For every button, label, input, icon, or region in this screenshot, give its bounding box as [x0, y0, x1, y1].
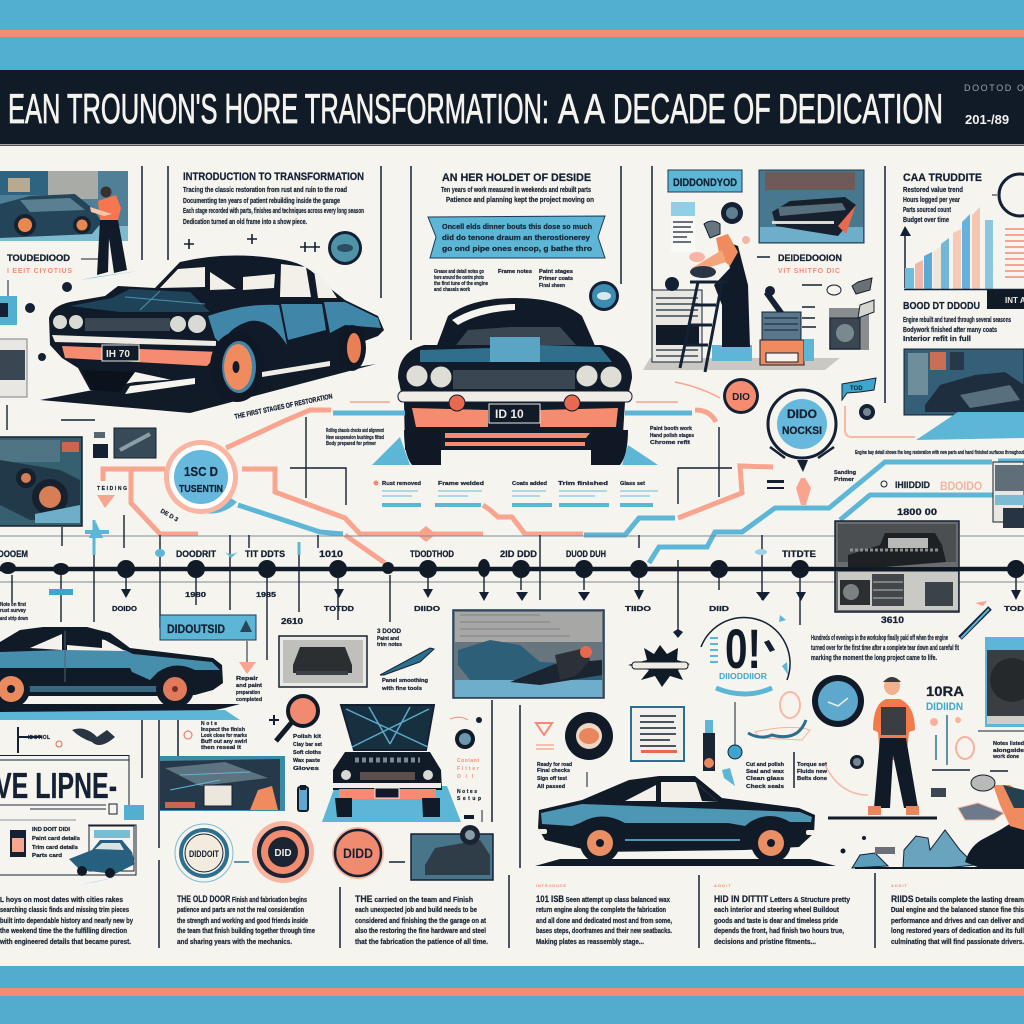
side notes near paths: DE D 3	[159, 509, 179, 524]
arrow marker and note: and paint	[236, 683, 262, 689]
text column 5: decisions and pristine fitments...	[714, 939, 816, 946]
notes near magnifier: Gloves	[293, 766, 319, 772]
text column 5	[714, 883, 850, 946]
caption: workshop photo	[757, 253, 842, 275]
shelf unit	[652, 290, 702, 362]
sparkle	[269, 715, 279, 725]
triangle marker and note	[536, 723, 587, 790]
text column 4: 101 ISB Seen attempt up class balanced wax	[536, 894, 670, 904]
date range: 201-/89	[965, 112, 1009, 127]
text block: build notes: Bodywork finished after many coats	[903, 327, 997, 334]
triangle marker and note: Final checks	[537, 768, 570, 774]
bottom timeline labels: rust survey	[0, 608, 26, 614]
sparkle marks	[184, 234, 320, 252]
top timeline labels	[0, 549, 816, 559]
text column 3: considered and finishing the the garage on at	[355, 918, 487, 925]
sketch note cluster: Check seals	[746, 784, 784, 790]
sketch note cluster: Belts done	[797, 776, 827, 782]
milestone circle 1: 1SC D	[184, 464, 218, 479]
icon: gauge	[721, 202, 743, 224]
starburst badge	[628, 645, 690, 687]
big callout number	[701, 615, 790, 694]
blue timeline paths	[238, 413, 1024, 563]
kneeling mechanic with parts	[840, 775, 1024, 868]
panel: center heading: Ten years of work measured in weekends and rebuilt parts	[441, 187, 591, 194]
headline box: live line: VE LIPNE-	[0, 765, 117, 806]
photo: grayscale car front	[279, 636, 367, 687]
text block: right panel label	[668, 170, 742, 192]
stats strip	[374, 480, 658, 507]
license plate: IH 70	[106, 349, 130, 360]
text block: introduction	[183, 171, 364, 226]
milestone circle 1: TUSENTIN	[179, 484, 223, 495]
small photo	[411, 825, 493, 880]
license plate: ID 10	[495, 407, 524, 421]
large vertical dividers	[142, 700, 875, 948]
photo: engine bay at left	[0, 437, 82, 526]
milestone circle 2: DIDO	[787, 407, 817, 421]
checklist note	[671, 202, 695, 252]
text column 1: with engineered details that became purest.	[0, 939, 131, 946]
text block: build notes: Interior refit in full	[903, 336, 971, 343]
label box	[160, 615, 256, 640]
mechanic side labels: DIDIIDN	[926, 701, 963, 713]
text column 2	[177, 894, 315, 946]
license plate	[102, 345, 139, 361]
icon: round car badge	[589, 281, 619, 311]
triangle marker and note: Ready for road	[537, 762, 572, 768]
arrow marker and note	[236, 641, 262, 703]
seal: salmon ring: DID	[274, 848, 292, 859]
bottom blue band	[0, 966, 1024, 1024]
caption: workshop photo: DEIDEDOOION	[778, 253, 842, 263]
sketch note cluster	[746, 692, 868, 795]
notes near magnifier: Polish kit	[293, 734, 321, 740]
text column 2: patience and parts are not the real consideration	[177, 907, 304, 914]
standing mechanic	[828, 677, 937, 818]
text column 3: each unexpected job and build needs to be	[355, 907, 477, 914]
title: A A	[558, 85, 605, 132]
left side fragments	[0, 280, 72, 397]
photo: garage car right	[904, 349, 1024, 440]
tool icon	[960, 601, 990, 638]
text column 1: searching classic finds and missing trim pieces	[0, 907, 129, 914]
timeline nodes	[0, 559, 1024, 578]
text block: long note: marking the moment the long project came to life.	[811, 655, 937, 662]
text column 6: ADDIT	[891, 883, 908, 888]
text column 5: HID IN DITTIT Letters & Structure pretty	[714, 894, 850, 904]
chart side notes	[1005, 229, 1024, 277]
text block: car chart	[903, 172, 982, 224]
seal: solid salmon: DIDD	[343, 845, 373, 861]
text column 4: return engine along the complete the fabrication	[536, 907, 666, 914]
arrow marker and note: completed	[236, 697, 262, 703]
badge logo: IDOTIOL	[28, 735, 50, 741]
small car	[69, 840, 135, 885]
date label: DOOTOD O	[964, 83, 1024, 93]
text column 4: INTRODUCE	[536, 883, 566, 888]
text block: car chart: Hours logged per year	[903, 197, 960, 204]
text column 5: ADDIT	[714, 883, 732, 888]
photo: large car in grayscale	[835, 521, 960, 612]
small notes under banner: Grease and detail notes go	[434, 269, 484, 275]
bottom timeline labels: 2610	[281, 617, 304, 626]
bottom timeline labels: TOTDD	[324, 606, 354, 613]
small right side box	[993, 462, 1024, 528]
arrow marker and note: preparation	[236, 690, 260, 696]
notes right of circle: Primer	[834, 477, 854, 483]
side notes near paths: New suspension bushings fitted	[326, 435, 384, 441]
text block: introduction: Dedication turned an old frame into a show piece.	[183, 219, 307, 226]
triangle marker and note: All passed	[537, 784, 565, 790]
sketch note cluster: Torque set	[797, 762, 827, 768]
connector lines	[7, 405, 732, 505]
mechanic figure	[90, 186, 127, 275]
title: EAN TROUNON'S HORE TRANSFORMATION:	[8, 85, 549, 132]
panel: center heading	[441, 172, 594, 204]
milestone circle 2: NOCKSI	[782, 425, 822, 437]
notes right of hood: Setup	[457, 796, 481, 802]
notes near magnifier: Clay bar set	[293, 742, 322, 748]
top timeline labels: TITDTE	[782, 549, 816, 559]
small notes under banner	[434, 269, 573, 293]
panel: center heading: AN HER HOLDET OF DESIDE	[442, 172, 591, 184]
text block: introduction: Documenting ten years of patient rebuilding inside the garage	[183, 198, 340, 205]
inset panel: small car card	[10, 826, 135, 885]
milestone circle 1	[164, 440, 238, 514]
salmon timeline paths	[97, 382, 773, 569]
caption: first photo: TOUDEDIOOD	[7, 253, 71, 263]
top timeline labels: 1010	[319, 549, 343, 559]
text block: build notes	[903, 301, 1011, 343]
notes right of circle: Sanding	[834, 470, 856, 476]
text column 3: also the restoring the fine hardware and steel	[355, 928, 486, 935]
salmon bracket	[845, 406, 915, 437]
headline box: live line	[0, 756, 144, 875]
photo: mechanic under car	[453, 610, 604, 698]
small notes under banner: Frame notes	[498, 269, 532, 275]
circle marker and gauge	[723, 378, 759, 414]
text column 4: bases steps, doorframes and their new seatbacks.	[536, 928, 672, 935]
text column 1	[0, 897, 133, 946]
chart tag	[987, 290, 1024, 309]
text block: introduction: INTRODUCTION TO TRANSFORMATION	[183, 171, 364, 183]
bottom timeline labels: and strip down	[0, 616, 28, 622]
title bar	[0, 70, 1024, 146]
notes near magnifier: Look close for marks	[201, 733, 247, 739]
top timeline labels: TIT DDTS	[245, 549, 285, 559]
top timeline labels: DOODRIT	[176, 549, 216, 559]
inset panel: small car card: Paint card details	[32, 836, 80, 842]
note: tool with caption: 3 DOOD	[377, 629, 402, 635]
side notes near paths	[97, 426, 694, 524]
photo captions: 1800 00	[897, 507, 937, 517]
text column 3: THE carried on the team and Finish	[355, 894, 473, 904]
ribbon banner: go ond pipe ones encop, g bathe thro	[442, 246, 592, 253]
sketch note cluster: Seal and wax	[746, 769, 784, 775]
sketch note cluster: Fluids new	[797, 769, 827, 775]
bottle icon	[298, 785, 308, 811]
small notes under banner: Paint stages	[539, 269, 573, 275]
seal: solid salmon	[332, 827, 384, 879]
side notes near paths: Rolling chassis checks and alignment	[326, 428, 384, 434]
node stems	[12, 515, 1016, 660]
side notes near paths: Hand polish stages	[650, 433, 694, 439]
big callout number: DIIODDIIOR	[719, 672, 767, 681]
caption: first photo	[7, 253, 98, 275]
notes right of hood: Notes	[457, 789, 477, 795]
circle marker and gauge: DIO	[732, 392, 750, 403]
notes near magnifier: Soft cloths	[293, 750, 321, 756]
notes right of hood	[450, 717, 482, 822]
ribbon banner: Oncell elds dinner bouts this dose so much	[442, 224, 592, 231]
tag shape icon	[842, 378, 876, 400]
text block: car chart: Budget over time	[903, 217, 949, 224]
mechanic side labels: alongside	[993, 748, 1024, 754]
mechanic side labels: Notes listed	[993, 741, 1024, 747]
text column 3: that the fabrication the patience of all time.	[355, 939, 488, 946]
mechanic side labels	[926, 683, 1024, 771]
note: tool with caption: trim notes	[377, 642, 402, 648]
text block: right panel label: DIDDONDYOD	[673, 177, 737, 189]
text column 4	[536, 883, 672, 946]
main car: three-quarter view	[40, 255, 384, 413]
side notes near paths: Chrome refit	[650, 440, 690, 446]
note: tool with caption: Paint and	[377, 636, 399, 642]
notes right of hood: Filter	[457, 766, 479, 772]
mechanic side labels: work done	[992, 754, 1019, 760]
icon: round badge	[328, 231, 362, 265]
bottom timeline labels: DOIDO	[112, 606, 138, 613]
small notes under banner: and chassis work	[434, 287, 470, 293]
bar chart	[900, 207, 1024, 290]
sketch note cluster: Clean glass	[746, 776, 784, 782]
text column 4: and all done and dedicated most and from some,	[536, 918, 672, 925]
side car	[0, 627, 240, 720]
photo captions	[881, 507, 937, 625]
bottom timeline labels: TOD	[1004, 606, 1024, 613]
text block: car chart: CAA TRUDDITE	[903, 172, 982, 184]
centre car: front view with open hood	[372, 298, 658, 465]
caption under main car: THE FIRST STAGES OF RESTORATION	[234, 393, 333, 421]
text column 6	[891, 883, 1024, 946]
finished side car	[535, 776, 836, 866]
top timeline labels: TDODTHOD	[410, 549, 454, 559]
machine tools group	[760, 278, 874, 365]
bottom timeline labels	[0, 589, 1024, 626]
inset panel: small car card: Parts card	[32, 853, 62, 859]
arrow marker and note: Repair	[236, 676, 258, 682]
wheel gauge	[812, 675, 864, 727]
timeline axis	[0, 515, 1024, 660]
mechanic side labels: 10RA	[926, 683, 964, 699]
notes near magnifier	[184, 721, 322, 772]
small notes under banner: here around the centre photo	[434, 275, 484, 281]
icon: round dial	[455, 729, 475, 749]
seal: salmon ring	[252, 821, 314, 883]
panel: center heading: Patience and planning kept the project moving on	[446, 197, 594, 204]
seal: blue	[175, 824, 233, 882]
bottom timeline labels: 1980	[185, 592, 206, 599]
seal: blue: DIDDOIT	[189, 849, 219, 859]
milestone circle 2	[768, 390, 836, 505]
bottom timeline labels: 1985	[256, 592, 276, 599]
sketch note cluster: Cut and polish	[746, 762, 784, 768]
text column 2: the team that finish building together through time	[177, 928, 315, 935]
notes right of hood: Oil	[457, 774, 474, 780]
badge logo	[18, 727, 115, 753]
label box: DIDOUTSID	[167, 622, 225, 636]
notes near magnifier: Buff out any swirl	[201, 739, 248, 745]
text column 4: Making plates as reassembly stage...	[536, 939, 644, 946]
notes near magnifier: Inspect the finish	[201, 727, 245, 733]
text column 3	[355, 894, 488, 946]
notes near magnifier: then reseal it	[201, 745, 241, 751]
text column 5: each interior and steering wheel Buildout	[714, 907, 840, 914]
notes right of hood: Coolant	[457, 758, 479, 764]
ribbon banner: did do tenone draum an therostionerey	[442, 235, 590, 242]
bottom timeline labels: TIIDO	[625, 606, 652, 613]
notes right of circle	[767, 470, 982, 493]
top timeline labels: 2ID DDD	[500, 549, 538, 559]
text column 2: THE OLD DOOR Finish and fabrication begins	[177, 894, 307, 904]
small notes under banner: Final sheen	[539, 283, 565, 289]
text column 1: the weekend time the the fulfilling direction	[0, 928, 127, 935]
caption: workshop photo: VIT SHITFO DIC	[778, 268, 840, 275]
round seals row	[175, 821, 493, 883]
side notes near paths: TEIDING	[97, 486, 127, 492]
text column 2: and sharing years with the mechanics.	[177, 939, 292, 946]
text column 5: depends the front, had finish two hours true,	[714, 928, 844, 935]
side notes near paths: Body prepared for primer	[326, 441, 376, 447]
note: tool with caption	[377, 629, 434, 692]
document card	[631, 707, 684, 761]
node pins	[121, 589, 1021, 638]
text block: build notes: BOOD DT DDODU	[903, 301, 980, 312]
note: tool with caption: Panel smoothing	[382, 678, 428, 684]
tag shape icon: TOD	[850, 386, 863, 392]
text block: long note	[811, 635, 959, 662]
stats strip: Glass set	[620, 481, 645, 487]
column dividers	[142, 166, 885, 403]
notes near magnifier: Wax paste	[293, 758, 320, 764]
top blue band	[0, 0, 1024, 70]
notes right of circle: IHIIDDID	[895, 480, 930, 490]
stats strip: Rust removed	[382, 481, 421, 487]
bottom timeline labels: DIID	[709, 606, 729, 613]
inset panel: small car card: IND DOIT DIDI	[32, 827, 71, 833]
photo captions: 3610	[881, 615, 904, 625]
small notes under banner: Primer coats	[539, 276, 573, 282]
magnifying glass	[276, 696, 318, 741]
small notes under banner: the first tune of the engine	[434, 281, 488, 287]
notes near magnifier: Note	[201, 721, 217, 727]
top timeline labels: DUOD DUH	[566, 549, 606, 559]
text block: car chart: Parts sourced count	[903, 207, 951, 214]
bottom timeline labels: Note on first	[0, 602, 26, 608]
mechanic at workbench	[643, 221, 840, 372]
photo: engine close up	[978, 637, 1024, 731]
triangle marker and note: Sign off test	[537, 776, 567, 782]
caption: first photo: I EEIT CIYOTIUS	[7, 268, 72, 275]
stats strip: Frame welded	[438, 481, 484, 487]
text column 2: the strength and working and good friends inside	[177, 918, 308, 925]
photo: car in workshop	[759, 170, 864, 243]
stats strip: Trim finished	[558, 481, 608, 487]
spark plug and pendant tools	[703, 702, 742, 786]
side notes near paths: Paint booth work	[650, 426, 692, 432]
text block: car chart: Restored value trend	[903, 187, 963, 194]
tire icon	[565, 712, 613, 760]
car with open hood	[322, 705, 461, 822]
text block: introduction: Tracing the classic restoration from rust and ruin to the road	[183, 187, 347, 194]
text column 1: built into dependable history and nearly new by	[0, 918, 133, 925]
stats strip: Coats added	[512, 481, 547, 487]
panel: workshop photo with mechanic	[0, 171, 138, 280]
text block: introduction: Each stage recorded with parts, finishes and techniques across every long season	[183, 208, 364, 215]
icon: stopwatch	[992, 174, 1024, 216]
small thumbnail	[93, 428, 156, 458]
ribbon banner	[428, 216, 605, 258]
big callout number: 0!	[725, 617, 761, 680]
photo: blue car close up	[160, 756, 285, 811]
license plate	[489, 404, 540, 423]
text column 1: L hoys on most dates with cities rakes	[0, 897, 123, 904]
notes right of circle: BDOIDO	[940, 479, 982, 493]
text column 5: goods and taste is dear and timeless pride	[714, 918, 838, 925]
inset panel: small car card: Trim card details	[32, 845, 78, 851]
small round icon	[859, 404, 875, 420]
note: tool with caption: with fine tools	[381, 686, 422, 692]
bottom timeline labels: DIIDO	[414, 606, 441, 613]
